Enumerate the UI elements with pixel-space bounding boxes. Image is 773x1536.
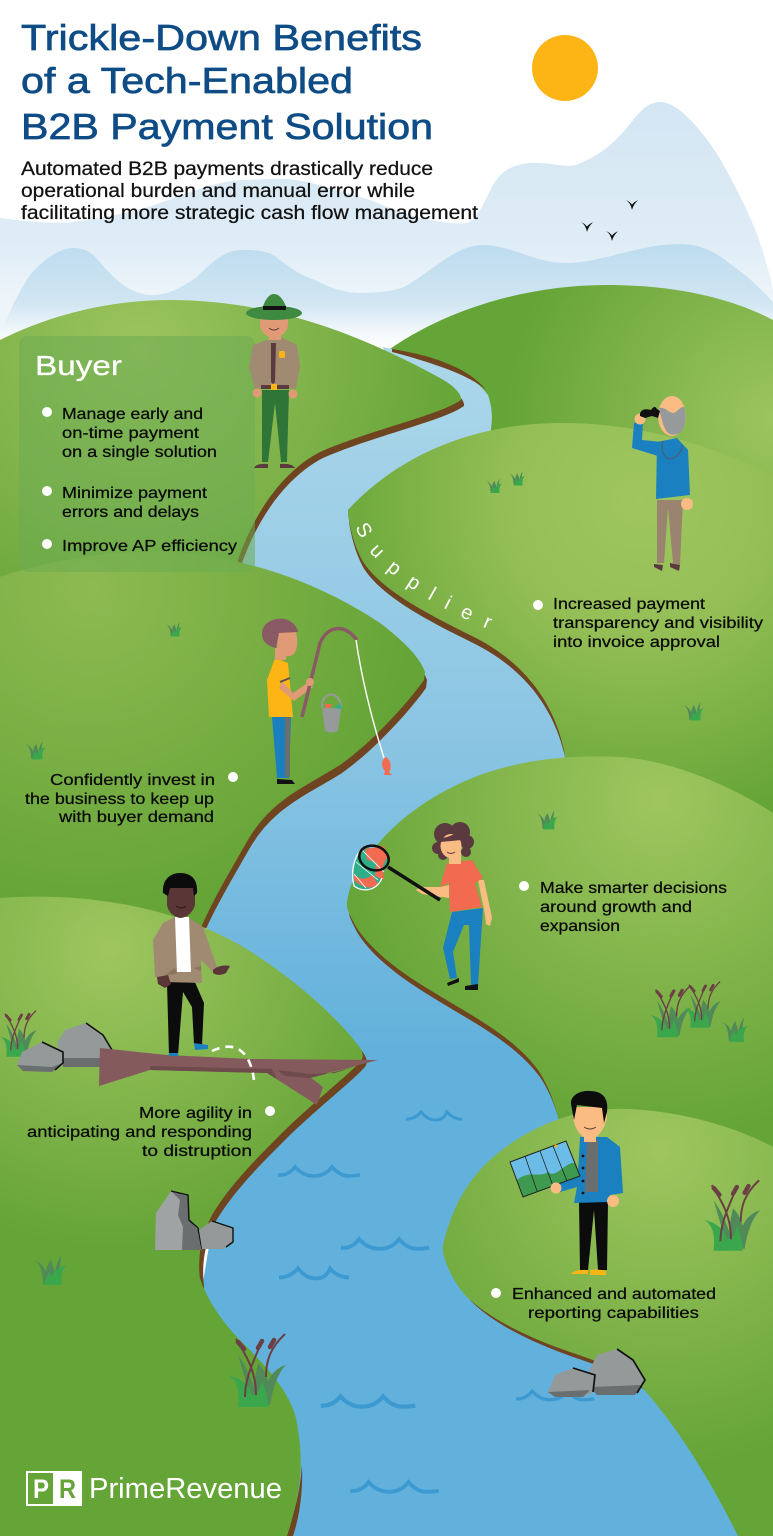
character: woman with net	[353, 822, 492, 990]
birds	[581, 200, 638, 241]
buyer benefit list: errors and delays	[62, 504, 199, 521]
text: payment transparency: Increased payment	[553, 596, 706, 613]
text: smarter decisions: expansion	[540, 918, 620, 935]
water ripples	[278, 1112, 594, 1492]
character: man with binoculars	[632, 396, 693, 571]
river	[190, 347, 773, 1536]
text: smarter decisions	[519, 880, 727, 935]
text: confidently invest: with buyer demand	[58, 809, 214, 826]
fallen log	[99, 1048, 378, 1105]
logo: PrimeRevenue: R	[59, 1474, 76, 1504]
text: payment transparency: into invoice approval	[553, 634, 720, 651]
rocks: right bank	[548, 1349, 645, 1397]
far bank	[392, 349, 486, 390]
buyer benefit list	[42, 406, 237, 555]
logo: PrimeRevenue: P	[33, 1474, 49, 1504]
buyer heading: Buyer	[35, 350, 122, 381]
subtitle: operational burden and manual error while	[21, 181, 415, 202]
character: boy fishing	[262, 619, 392, 784]
buyer benefit list: Improve AP efficiency	[62, 538, 237, 555]
hill: buyer	[0, 300, 464, 626]
text: agility	[27, 1105, 275, 1160]
text: confidently invest: Confidently invest in	[50, 772, 215, 789]
text: payment transparency: transparency and visibility	[553, 615, 763, 632]
rocks: near log	[17, 1023, 112, 1072]
text: agility: to distruption	[142, 1143, 252, 1160]
character: park ranger	[246, 294, 302, 468]
front mountains	[0, 244, 773, 350]
character: man on log	[153, 873, 230, 1056]
hill: log	[0, 897, 367, 1536]
hill: bottom left	[100, 1278, 302, 1536]
text: confidently invest	[25, 772, 238, 826]
title: of a Tech-Enabled	[21, 60, 353, 101]
hill: supplier	[348, 423, 773, 837]
text: agility: More agility in	[139, 1105, 252, 1122]
buyer benefit list: on a single solution	[62, 444, 217, 461]
text: reporting: Enhanced and automated	[512, 1286, 716, 1303]
rocks: lower bank	[155, 1191, 233, 1250]
back mountains	[0, 102, 773, 345]
hill: net	[347, 756, 773, 1207]
text: agility: anticipating and responding	[27, 1124, 252, 1141]
text: confidently invest: the business to keep up	[25, 791, 214, 808]
buyer benefit list: Manage early and	[62, 406, 203, 423]
stepping arc	[212, 1047, 254, 1080]
hill: far right	[383, 285, 773, 1536]
buyer benefit list: Minimize payment	[62, 485, 208, 502]
title: Trickle-Down Benefits	[21, 17, 422, 58]
subtitle: facilitating more strategic cash flow management	[21, 203, 479, 224]
title	[21, 17, 433, 147]
hill: fisher	[0, 552, 427, 1008]
buyer benefit list: on-time payment	[62, 425, 200, 442]
character: man with map	[510, 1091, 623, 1275]
sun	[532, 35, 598, 101]
text: reporting: reporting capabilities	[528, 1305, 699, 1322]
subtitle	[21, 159, 479, 224]
hill: map	[443, 1109, 773, 1536]
text: smarter decisions: Make smarter decisions	[540, 880, 727, 897]
reeds	[0, 982, 760, 1407]
logo: PrimeRevenue	[27, 1471, 282, 1506]
subtitle: Automated B2B payments drastically reduce	[21, 159, 433, 180]
text: smarter decisions: around growth and	[540, 899, 692, 916]
text: payment transparency	[533, 596, 763, 651]
logo: PrimeRevenue: PrimeRevenue	[89, 1473, 282, 1505]
text: reporting	[491, 1286, 716, 1322]
title: B2B Payment Solution	[21, 106, 433, 147]
buyer panel	[19, 336, 255, 572]
supplier curved heading: Supplier	[356, 523, 492, 628]
grass tufts	[25, 471, 748, 1285]
